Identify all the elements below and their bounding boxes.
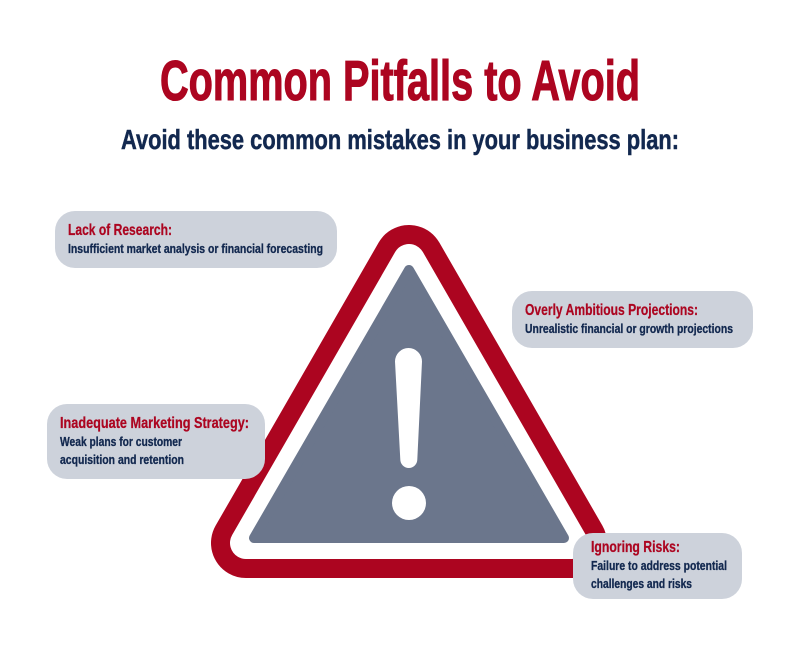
text: ignoring risks description: Failure to address potential [591,558,727,573]
text: overly ambitious projections description: Unrealistic financial or growth projections [525,321,733,336]
icon: exclamation mark [392,348,426,520]
panel: lack of research [55,211,337,268]
text: lack of research description: Insufficient market analysis or financial forecasting [68,241,323,256]
text: ignoring risks description: challenges and risks [591,576,692,591]
panel: inadequate marketing strategy [47,404,265,479]
text: inadequate marketing strategy description [60,434,184,467]
text: inadequate marketing strategy description: Weak plans for customer [60,434,182,449]
heading: overly ambitious projections: Overly Ambitious Projections: [525,302,698,319]
text: inadequate marketing strategy description: acquisition and retention [60,452,184,467]
panel: overly ambitious projections [512,291,753,348]
icon: warning triangle [246,260,572,543]
heading: lack of research: Lack of Research: [68,222,172,239]
text: ignoring risks description [591,558,727,591]
panel: ignoring risks [573,533,742,599]
heading: inadequate marketing strategy: Inadequate Marketing Strategy: [60,415,249,432]
heading: ignoring risks: Ignoring Risks: [591,539,680,556]
